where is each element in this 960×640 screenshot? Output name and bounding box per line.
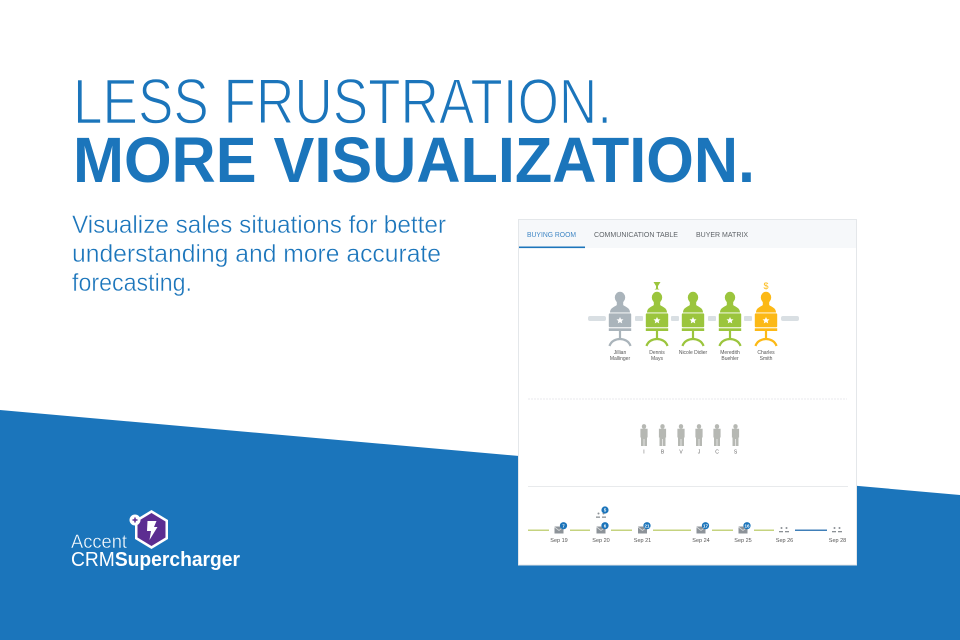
timeline: 16 — [744, 523, 750, 528]
timeline — [528, 506, 846, 544]
timeline: 6 — [604, 523, 607, 528]
small people row: C — [715, 450, 719, 456]
seat: Meredith Buehler: Meredith — [720, 350, 740, 356]
small people row: B — [661, 450, 665, 456]
timeline dates: Sep 26 — [776, 538, 793, 544]
seat: Jillian Mallinger: Mallinger — [610, 356, 630, 362]
seat: Dennis Mays: Mays — [651, 356, 663, 362]
logo: Accent CRM Supercharger — [71, 510, 240, 571]
seat: Dennis Mays — [646, 282, 668, 362]
seat: Charles Smith: $ — [763, 281, 769, 291]
seat: Charles Smith: Charles — [757, 350, 775, 356]
small people row: S — [734, 450, 738, 456]
timeline dates: Sep 24 — [692, 538, 710, 544]
subtitle text block: forecasting. — [72, 269, 192, 297]
tab bar: BUYER MATRIX — [696, 232, 748, 239]
seat: Jillian Mallinger — [609, 292, 631, 362]
small people row: V — [679, 450, 683, 456]
small people row: I — [643, 450, 645, 456]
seat: Nicole Didier — [679, 292, 708, 356]
seat: Dennis Mays: Dennis — [649, 350, 665, 356]
subtitle text block: Visualize sales situations for better — [72, 211, 446, 239]
logo: Accent CRM Supercharger: CRMSupercharger — [71, 549, 240, 571]
seat: Meredith Buehler: Buehler — [721, 356, 739, 362]
timeline icons — [554, 526, 564, 534]
tab bar — [519, 220, 856, 248]
logo wordmark: Accent — [71, 532, 128, 553]
title line 2: MORE VISUALIZATION. — [73, 124, 755, 196]
seat: Nicole Didier: Nicole Didier — [679, 350, 708, 356]
small people row: J — [698, 450, 701, 456]
connectors between seats — [588, 316, 799, 321]
subtitle text block: understanding and more accurate — [72, 240, 441, 268]
timeline badges — [560, 506, 751, 529]
seat: Jillian Mallinger: Jillian — [614, 350, 626, 356]
timeline dates: Sep 19 — [550, 538, 568, 544]
panel: product screenshot — [518, 220, 856, 565]
timeline segments — [528, 530, 774, 531]
tab bar: COMMUNICATION TABLE — [594, 232, 678, 239]
subtitle text block — [72, 211, 446, 297]
small people row — [640, 424, 739, 456]
title — [73, 66, 755, 196]
icon: hexagon bolt — [130, 510, 168, 549]
timeline dates: Sep 20 — [592, 538, 610, 544]
seat: Charles Smith: Smith — [760, 356, 773, 362]
tab bar: BUYING ROOM — [527, 232, 576, 239]
timeline: 17 — [703, 523, 708, 528]
title line 1: LESS FRUSTRATION. — [73, 66, 612, 138]
timeline dates — [550, 538, 846, 544]
timeline dates: Sep 25 — [734, 538, 752, 544]
timeline: 7 — [562, 523, 565, 528]
timeline: 21 — [644, 523, 650, 528]
timeline: 5 — [604, 508, 607, 513]
seat: Charles Smith — [755, 281, 777, 362]
blue diagonal background — [0, 410, 960, 640]
timeline dates: Sep 21 — [634, 538, 651, 544]
seat: Meredith Buehler — [719, 292, 741, 362]
timeline dates: Sep 28 — [829, 538, 846, 544]
